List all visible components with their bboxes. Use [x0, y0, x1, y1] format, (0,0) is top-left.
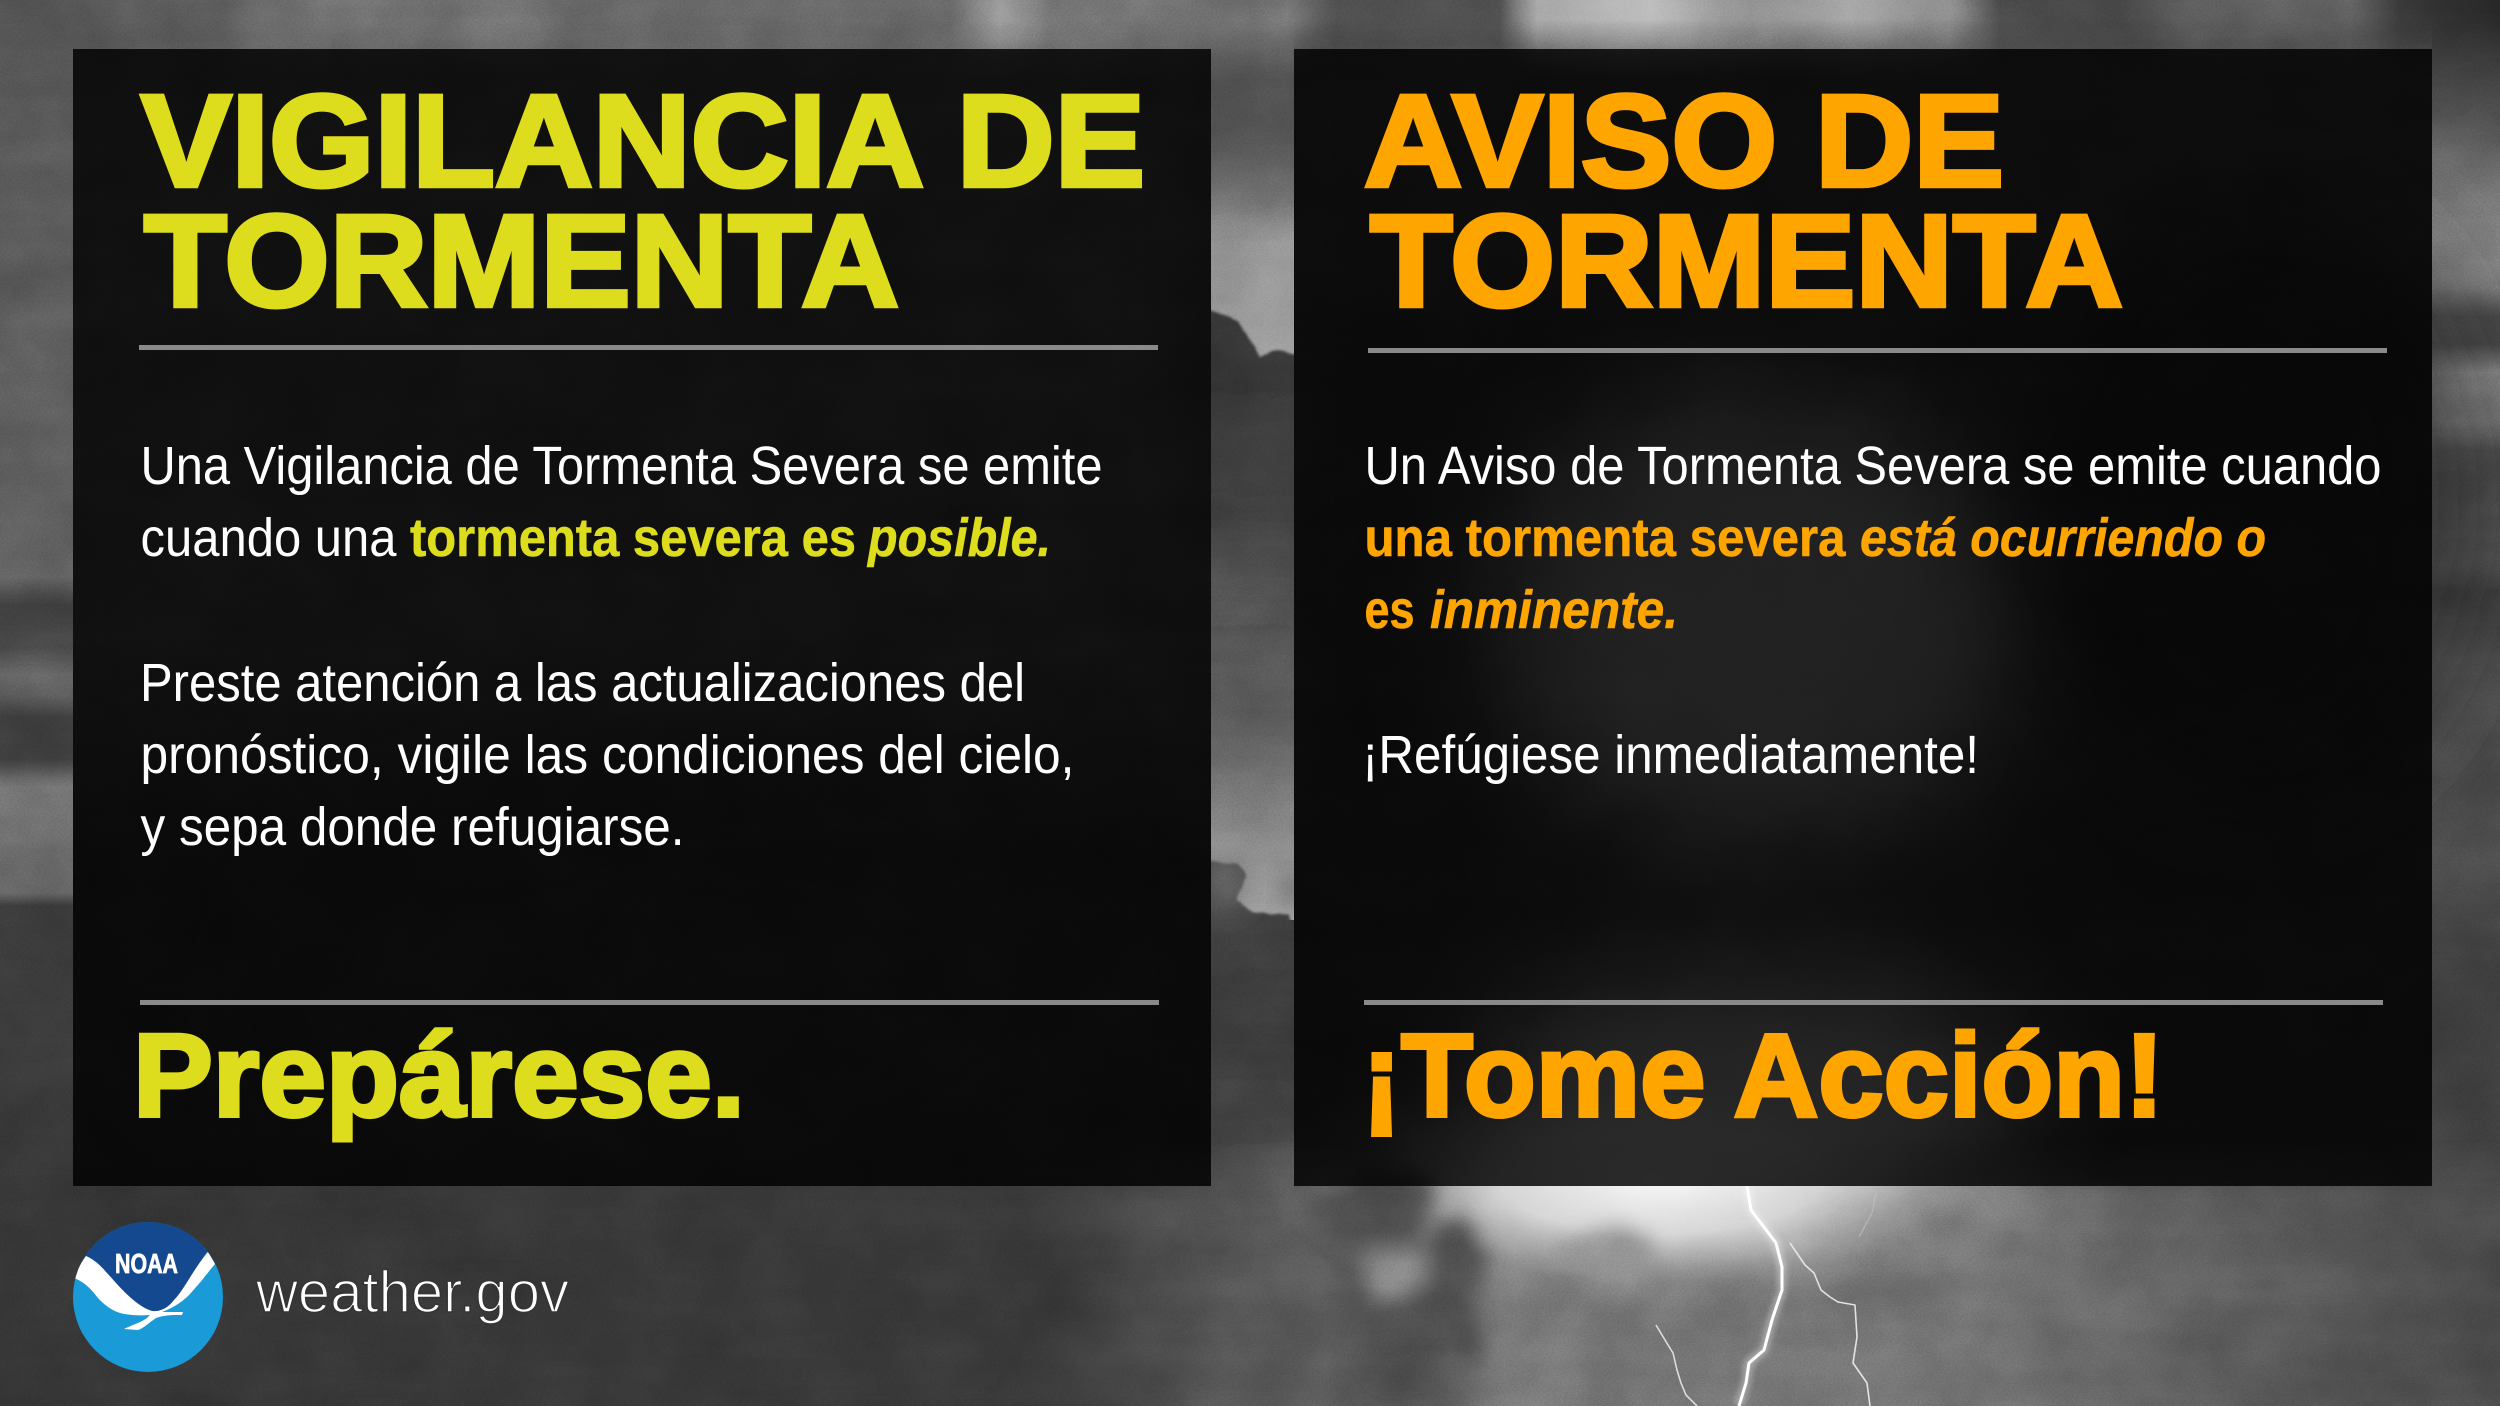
panel: aviso de tormenta — [1294, 49, 2432, 1186]
body text: warning description: está ocurriendo o — [1860, 508, 2266, 568]
heading: aviso de tormenta: AVISO DE — [1364, 67, 2004, 214]
heading: aviso de tormenta — [1364, 67, 2123, 334]
body text: watch description: posible. — [866, 508, 1051, 568]
icon: NOAA logo — [70, 1222, 226, 1372]
website: weather.gov: weather.gov — [255, 1260, 569, 1325]
logo wordmark: NOAA — [115, 1248, 178, 1279]
body text: watch description: Preste atención a las actualizaciones del — [140, 653, 1025, 713]
body text: warning description — [1362, 436, 2382, 785]
body text: watch description: Una Vigilancia de Tormenta Severa se emite — [140, 436, 1102, 496]
heading: aviso de tormenta: TORMENTA — [1370, 187, 2123, 334]
gap between panels — [1211, 53, 1294, 1158]
ground sky below panels — [338, 1160, 2498, 1406]
heading: vigilancia de tormenta: VIGILANCIA DE — [141, 67, 1145, 214]
panel: vigilancia de tormenta — [73, 49, 1211, 1186]
call to action: prepárese: Prepárese. — [133, 1010, 745, 1142]
top sky streaks — [0, 0, 2500, 66]
body text: warning description: una tormenta severa — [1364, 508, 1846, 568]
call to action: tome acción: ¡Tome Acción! — [1362, 1010, 2164, 1142]
body text: warning description: es — [1364, 580, 1414, 640]
body text: watch description: pronóstico, vigile las condiciones del cielo, — [140, 725, 1074, 785]
body text: warning description: inminente. — [1430, 580, 1678, 640]
panel background — [1294, 49, 2432, 1186]
light behind right panel — [1500, 390, 2020, 850]
heading: vigilancia de tormenta: TORMENTA — [144, 187, 899, 334]
body text: watch description: tormenta severa es — [410, 508, 856, 568]
panel background — [73, 49, 1211, 1186]
body text: watch description — [140, 436, 1102, 857]
body text: watch description: cuando una — [140, 508, 397, 568]
body text: warning description: Un Aviso de Tormenta Severa se emite cuando — [1364, 436, 2382, 496]
lightning bolts — [1656, 1186, 1876, 1406]
body text: watch description: y sepa donde refugiarse. — [140, 797, 684, 857]
heading: vigilancia de tormenta — [141, 67, 1145, 334]
body text: warning description: ¡Refúgiese inmediatamente! — [1362, 725, 1979, 785]
